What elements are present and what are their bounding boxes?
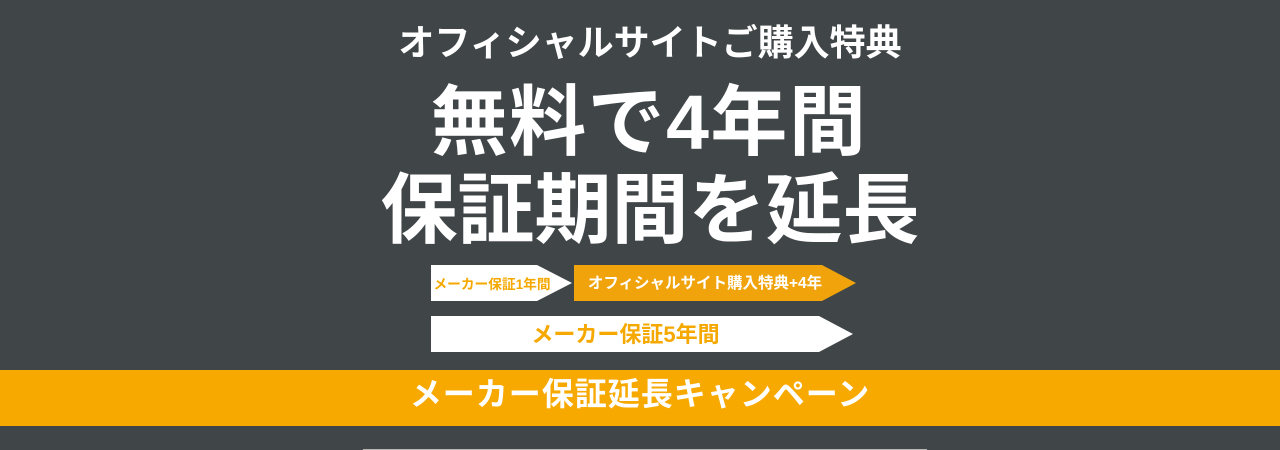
- bottom panel edge: [363, 449, 927, 450]
- main heading line 1: 無料で4年間: [431, 80, 867, 166]
- arrow: maker warranty 1 year: [431, 265, 572, 301]
- arrow: official site bonus +4 years: [574, 265, 856, 301]
- campaign banner: [0, 370, 1280, 426]
- campaign banner text: メーカー保証延長キャンペーン: [410, 376, 870, 412]
- arrow: maker warranty 5 years: [431, 316, 853, 352]
- arrow: maker warranty 5 years: メーカー保証5年間: [531, 322, 720, 347]
- arrow: official site bonus +4 years: オフィシャルサイト購入特典+4年: [588, 273, 822, 292]
- arrow: maker warranty 1 year: メーカー保証1年間: [433, 276, 551, 292]
- subtitle: オフィシャルサイトご購入特典: [398, 22, 902, 63]
- main heading line 2: 保証期間を延長: [380, 168, 920, 254]
